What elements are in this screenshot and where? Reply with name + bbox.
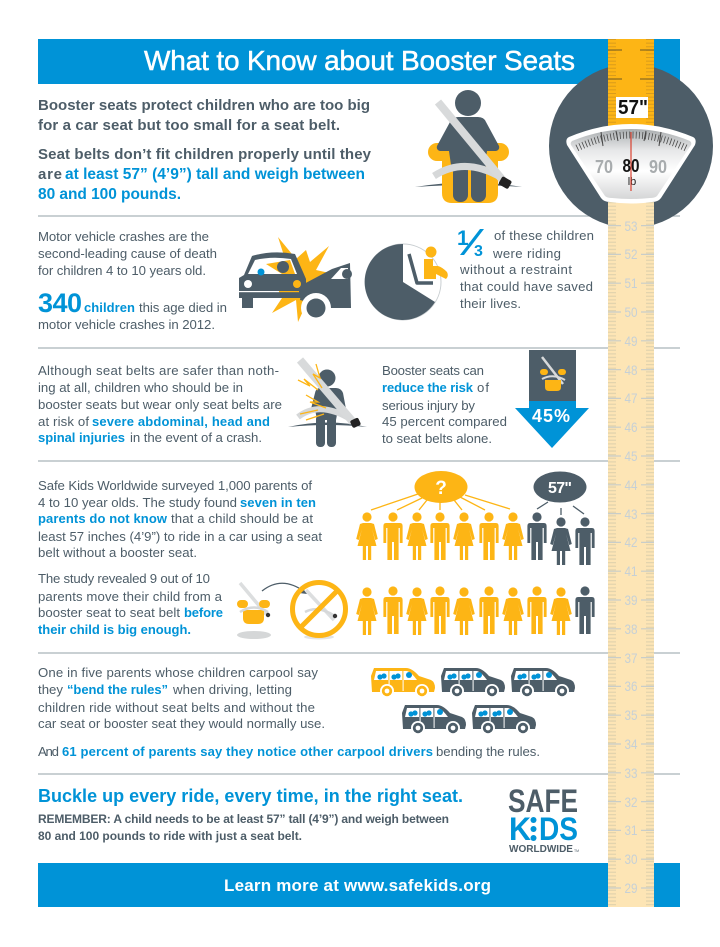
scale dial face (566, 124, 696, 204)
survey followup text: booster seat to seat belt (38, 605, 180, 620)
booster risk text: 45 percent compared (382, 414, 507, 429)
speech bubble: question mark with lines (371, 471, 510, 510)
ruler: lower pale section: 49 (624, 333, 638, 349)
logo: Safe Kids Worldwide: WORLDWIDE (509, 844, 573, 855)
one third stat text: without a restraint (459, 262, 572, 277)
closing message: REMEMBER: A child needs to be at least 57” tall (4’9”) and weigh between (38, 812, 449, 826)
crash stat text: children (84, 300, 135, 315)
carpool statistic text: bending the rules. (436, 744, 540, 759)
intro text: 80 and 100 pounds. (38, 186, 181, 203)
footer banner (38, 863, 680, 907)
ruler: lower pale section: 51 (624, 275, 638, 291)
icon: child in booster seat with seat belt (415, 90, 522, 203)
crash stat text: this age died in (139, 300, 227, 315)
survey text: belt without a booster seat. (38, 545, 197, 560)
one third stat text: 1 (457, 227, 469, 250)
ruler: lower pale section (608, 202, 654, 907)
seat belt injury text: in the event of a crash. (130, 430, 262, 445)
booster risk text: serious injury by (382, 398, 475, 413)
ruler: lower pale section: 45 (624, 448, 638, 464)
survey text (38, 478, 322, 560)
booster risk text: reduce the risk (382, 380, 474, 395)
closing message: Buckle up every ride, every time, in the right seat. (38, 786, 463, 806)
crash stat text: motor vehicle crashes in 2012. (38, 317, 215, 332)
scale dial face: 80 (622, 156, 640, 176)
ruler: lower pale section: 39 (624, 592, 638, 608)
ruler: lower pale section: 30 (624, 851, 638, 867)
intro text: for a car seat but too small for a seat belt. (38, 117, 340, 134)
ruler: lower pale section: 41 (624, 563, 638, 579)
ruler: lower pale section: 43 (624, 506, 638, 522)
seat belt injury text: spinal injuries (38, 430, 125, 445)
booster risk text (382, 363, 507, 446)
ruler: lower pale section: 36 (624, 678, 638, 694)
logo: Safe Kids Worldwide: DS (539, 811, 578, 847)
booster risk text: of (477, 380, 489, 395)
speech bubble: 57 inches with lines: 57" (548, 480, 572, 497)
ruler: lower pale section: 37 (624, 650, 638, 666)
ruler: lower pale section: 33 (624, 765, 638, 781)
footer banner: Learn more at www.safekids.org (224, 876, 491, 895)
arrow: 45 percent reduction: 45% (532, 406, 570, 426)
seat belt injury text: severe abdominal, head and (92, 414, 270, 429)
survey followup text: parents move their child from a (38, 589, 223, 604)
one third stat text: were riding (492, 246, 561, 261)
ruler: lower pale section: 53 (624, 218, 638, 234)
survey followup text: The study revealed 9 out of 10 (38, 571, 210, 586)
seat belt injury text (38, 363, 282, 445)
icon: booster seat moved to seat belt only, prohibited (237, 582, 346, 640)
carpool statistic text: And (38, 744, 59, 759)
ruler: lower pale section: 47 (624, 390, 638, 406)
intro text: Seat belts don’t fit children properly until they (38, 146, 372, 163)
intro text: are (38, 166, 62, 183)
carpool text: they (38, 682, 63, 697)
ruler: lower pale section: 50 (624, 304, 638, 320)
one third stat text: 3 (474, 243, 483, 260)
ruler: lower pale section: 46 (624, 419, 638, 435)
speech bubble: 57 inches with lines (534, 472, 586, 515)
scale dial face: lb (628, 176, 636, 188)
carpool text: car seat or booster seat they would normally use. (38, 716, 325, 731)
crash stat text (38, 229, 227, 332)
carpool text: children ride without seat belts and without the (38, 700, 315, 715)
speech bubble: question mark with lines: ? (435, 478, 447, 499)
crash stat text: for children 4 to 10 years old. (38, 263, 206, 278)
survey text: least 57 inches (4’9”) to ride in a car using a seat (38, 529, 322, 544)
ruler: lower pale section: 34 (624, 736, 638, 752)
arrow: 45 percent reduction (515, 350, 589, 448)
section dividers (38, 216, 680, 774)
survey text: seven in ten (240, 495, 316, 510)
one third stat text (457, 227, 594, 311)
closing message: 80 and 100 pounds to ride with just a seat belt. (38, 829, 302, 843)
booster risk text: to seat belts alone. (382, 431, 492, 446)
carpool text: One in five parents whose children carpool say (38, 665, 318, 680)
carpool text (38, 665, 325, 731)
ruler: lower pale section: 31 (624, 822, 638, 838)
carpool text: when driving, letting (172, 682, 292, 697)
crash stat text: second-leading cause of death (38, 246, 217, 261)
carpool text: “bend the rules” (67, 682, 168, 697)
one third stat text: their lives. (460, 296, 521, 311)
ruler: lower pale section: 35 (624, 707, 638, 723)
pie chart: one third unrestrained (365, 244, 448, 320)
survey followup text (38, 571, 223, 637)
crash stat text: Motor vehicle crashes are the (38, 229, 209, 244)
intro text: at least 57” (4’9”) tall and weigh between (65, 166, 365, 183)
ruler: upper orange section with 57 inch marker (608, 39, 654, 129)
intro text: Booster seats protect children who are too big (38, 97, 370, 114)
icon: car crash (239, 237, 352, 323)
ruler: lower pale section: 42 (624, 534, 638, 550)
carpool vans (371, 668, 575, 735)
seat belt injury text: ing at all, children who should be in (38, 380, 243, 395)
title banner: What to Know about Booster Seats (144, 45, 575, 76)
seat belt injury text: at risk of (38, 414, 89, 429)
survey text: parents do not know (38, 511, 168, 526)
one third stat text: that could have saved (460, 279, 593, 294)
seat belt injury text: booster seats but wear only seat belts are (38, 397, 282, 412)
people row: nine in ten parents (356, 586, 595, 635)
booster risk text: Booster seats can (382, 363, 484, 378)
logo: Safe Kids Worldwide: K (509, 811, 531, 847)
closing message (38, 786, 463, 843)
carpool statistic text: 61 percent of parents say they notice other carpool drivers (62, 744, 433, 759)
ruler: lower pale section: 38 (624, 621, 638, 637)
scale dial face: 90 (649, 157, 667, 177)
one third stat text: of these children (494, 228, 594, 243)
survey followup text: their child is big enough. (38, 622, 191, 637)
scale dial circle (549, 64, 713, 228)
people row: seven in ten parents (356, 512, 595, 565)
logo: Safe Kids Worldwide: SAFE (508, 783, 578, 819)
ruler: lower pale section: 52 (624, 246, 638, 262)
crash stat text: 340 (38, 288, 82, 318)
intro text (38, 97, 372, 203)
logo: Safe Kids Worldwide (508, 783, 579, 855)
title banner (38, 39, 680, 84)
scale dial face: 70 (595, 157, 613, 177)
seat belt injury text: Although seat belts are safer than noth- (38, 363, 279, 378)
survey text: Safe Kids Worldwide surveyed 1,000 parents of (38, 478, 312, 493)
icon: injured child with seat belt (288, 360, 367, 447)
survey text: that a child should be at (171, 511, 313, 526)
ruler: lower pale section: 44 (624, 477, 638, 493)
ruler: lower pale section: 48 (624, 362, 638, 378)
survey text: 4 to 10 year olds. The study found (38, 495, 237, 510)
ruler: upper orange section with 57 inch marker: 57" (618, 97, 648, 119)
logo: Safe Kids Worldwide: TM (574, 849, 579, 853)
survey followup text: before (184, 605, 223, 620)
ruler: lower pale section: 32 (624, 794, 638, 810)
ruler: lower pale section: 29 (624, 880, 638, 896)
